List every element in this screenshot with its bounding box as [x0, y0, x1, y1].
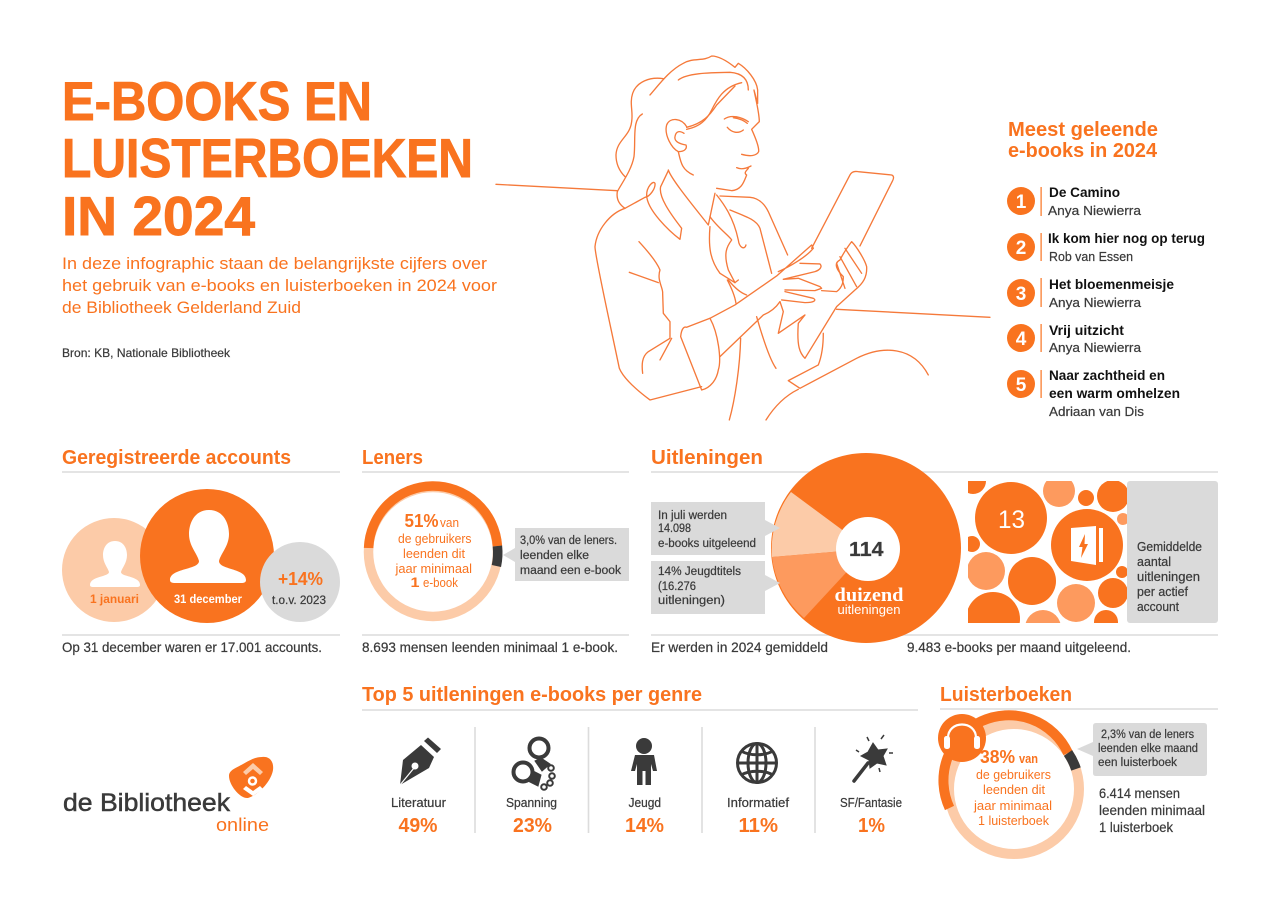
heading: genres: Top 5 uitleningen e-books per genre [362, 684, 702, 706]
heading: audiobooks: Luisterboeken [940, 684, 1072, 706]
ring text: de gebruikers [398, 531, 472, 546]
donut chart: 114 thousand loans: 114 [849, 539, 884, 561]
genre: Spanning [506, 738, 557, 837]
list item 4 [1007, 322, 1142, 355]
audiobook borrowers total text: 1 luisterboek [1099, 819, 1174, 835]
title: E-BOOKS EN [62, 70, 372, 132]
callout: monthly borrowers: 3,0% van de leners. [520, 535, 617, 547]
callout: monthly borrowers [503, 528, 629, 581]
list item 2: Ik kom hier nog op terug [1048, 230, 1205, 246]
genre: Jeugd: 14% [625, 815, 664, 837]
list item 5: Adriaan van Dis [1049, 404, 1145, 419]
accounts total text: Op 31 december waren er 17.001 accounts. [62, 639, 322, 655]
intro text: het gebruik van e-books en luisterboeken in 2024 voor [62, 276, 497, 295]
ring chart: 38 percent [943, 715, 1079, 854]
panel: loans [651, 447, 1218, 655]
circle: 1 januari [62, 518, 166, 622]
ring text [973, 747, 1052, 828]
list item 1: 1 [1016, 192, 1027, 213]
callout: July: e-books uitgeleend [658, 538, 756, 550]
ring text: van [440, 515, 459, 530]
ring text: 1 luisterboek [978, 813, 1049, 828]
circle: growth compared to 2023: +14% [278, 569, 323, 589]
list item 2 [1007, 230, 1205, 264]
callout: monthly audiobook borrowers: leenden elke maand [1098, 743, 1198, 755]
circle: 31 december: 31 december [174, 594, 242, 606]
list item 5: 5 [1016, 375, 1027, 396]
callout: July: In juli werden [658, 510, 727, 522]
genre: Literatuur: Literatuur [391, 796, 446, 810]
source note: Bron: KB, Nationale Bibliotheek [62, 346, 231, 360]
circle: growth compared to 2023: t.o.v. 2023 [272, 593, 326, 607]
genre: Informatief: 11% [738, 815, 778, 837]
icon: headphones [938, 714, 986, 762]
heading: loans: Uitleningen [651, 447, 763, 469]
list item 1 [1007, 184, 1142, 218]
panel: average loans label: uitleningen [1137, 570, 1200, 584]
logo: de Bibliotheek online: online [216, 815, 269, 835]
heading: most borrowed [1008, 119, 1158, 162]
monthly average text [651, 639, 1131, 655]
ring text: van [1019, 751, 1038, 766]
list item 1: De Camino [1049, 184, 1120, 200]
donut chart: 114 thousand loans [771, 453, 961, 643]
genre: Jeugd: Jeugd [628, 796, 661, 810]
genre: Jeugd [625, 738, 664, 837]
donut chart: 114 thousand loans: duizend [834, 585, 904, 606]
panel: average loans label [1127, 481, 1218, 623]
illustration: woman reading a tablet [496, 56, 990, 420]
heading: most borrowed: e-books in 2024 [1008, 140, 1158, 162]
callout: July: 14.098 [658, 523, 691, 535]
callout: monthly audiobook borrowers [1077, 723, 1207, 776]
audiobook borrowers total text: 6.414 mensen [1099, 785, 1180, 801]
ring text: jaar minimaal [395, 561, 472, 576]
ring text: 38% [980, 747, 1015, 767]
heading: accounts: Geregistreerde accounts [62, 447, 291, 469]
genre: Informatief: Informatief [727, 796, 790, 810]
title: IN 2024 [62, 185, 255, 247]
genre: Literatuur [391, 738, 446, 837]
list item 4: Vrij uitzicht [1049, 322, 1124, 338]
ring text: de gebruikers [976, 767, 1051, 782]
genre: SF/Fantasie [840, 735, 902, 837]
circle: 1 januari: 1 januari [90, 594, 139, 606]
heading: most borrowed: Meest geleende [1008, 119, 1158, 141]
callout: monthly audiobook borrowers: een luisterboek [1098, 757, 1177, 769]
icon: fountain pen [400, 738, 441, 785]
logo: de Bibliotheek online: de Bibliotheek [63, 789, 231, 817]
callout: youth titles [651, 561, 780, 614]
genre: Literatuur: 49% [398, 815, 438, 837]
list item 3: Anya Niewierra [1049, 295, 1142, 310]
monthly average text: 9.483 e-books per maand uitgeleend. [907, 639, 1131, 655]
list item 1: Anya Niewierra [1048, 203, 1142, 218]
intro text: de Bibliotheek Gelderland Zuid [62, 298, 301, 317]
genre: Spanning: Spanning [506, 796, 557, 810]
ring text: 51% [404, 511, 438, 531]
callout: youth titles: 14% Jeugdtitels [658, 566, 741, 578]
panel: average loans label: per actief [1137, 585, 1189, 599]
list item 4: 4 [1016, 329, 1027, 350]
audiobook borrowers total text: leenden minimaal [1099, 802, 1205, 818]
list item 5 [1007, 367, 1180, 419]
monthly average text: Er werden in 2024 gemiddeld [651, 639, 828, 655]
panel: most borrowed e-books [1007, 119, 1205, 419]
callout: monthly borrowers: maand een e-book [520, 565, 621, 577]
list item 3: 3 [1016, 284, 1026, 305]
list item 4: Anya Niewierra [1049, 340, 1142, 355]
callout: monthly borrowers: leenden elke [520, 550, 589, 562]
list item 5: Naar zachtheid en [1049, 367, 1165, 383]
donut chart: 114 thousand loans: uitleningen [838, 603, 901, 617]
ring text: jaar minimaal [973, 798, 1052, 813]
title: LUISTERBOEKEN [62, 127, 473, 189]
intro text: In deze infographic staan de belangrijkste cijfers over [62, 254, 487, 273]
panel: average loans label: Gemiddelde [1137, 540, 1202, 554]
list item 2: Rob van Essen [1049, 249, 1133, 264]
title [62, 70, 473, 247]
icon: handcuffs [514, 738, 555, 790]
callout: July [651, 502, 780, 555]
icon: globe [738, 743, 776, 783]
callout: youth titles: uitleningen) [658, 595, 725, 607]
icon: child [631, 738, 657, 785]
panel: average loans label: account [1137, 600, 1180, 614]
ring chart: 51 percent [368, 486, 498, 616]
list item 5: een warm omhelzen [1049, 385, 1180, 401]
panel: borrowers [362, 447, 629, 655]
ring text: e-book [423, 575, 458, 590]
logo: de Bibliotheek online [63, 757, 273, 835]
panel: average loans label: aantal [1137, 555, 1171, 569]
icon: magic wand [854, 735, 893, 781]
callout: youth titles: (16.276 [658, 581, 696, 593]
audiobook borrowers total text [1099, 785, 1205, 835]
list item 3: Het bloemenmeisje [1049, 276, 1174, 292]
borrowers total text: 8.693 mensen leenden minimaal 1 e-book. [362, 639, 618, 655]
bubble graphic: average loans per account [968, 481, 1127, 623]
ring text: 1 [410, 574, 420, 590]
list item 3 [1007, 276, 1174, 310]
callout: monthly audiobook borrowers: 2,3% van de leners [1101, 729, 1194, 741]
intro text [62, 254, 497, 317]
heading: borrowers: Leners [362, 447, 423, 469]
genre: Spanning: 23% [513, 815, 552, 837]
panel: registered accounts [62, 447, 340, 655]
genre: SF/Fantasie: 1% [858, 815, 885, 837]
panel: top 5 genres [362, 684, 918, 837]
circle: growth compared to 2023 [260, 542, 340, 622]
ring text: leenden dit [403, 546, 465, 561]
panel: audiobooks [938, 684, 1218, 854]
bubble graphic: average loans per account: 13 [998, 506, 1025, 534]
genre: Informatief [727, 743, 790, 837]
ring text [395, 511, 472, 590]
genre: SF/Fantasie: SF/Fantasie [840, 796, 902, 810]
circle: 31 december [140, 489, 274, 623]
list item 2: 2 [1016, 238, 1026, 259]
ring text: leenden dit [983, 782, 1045, 797]
